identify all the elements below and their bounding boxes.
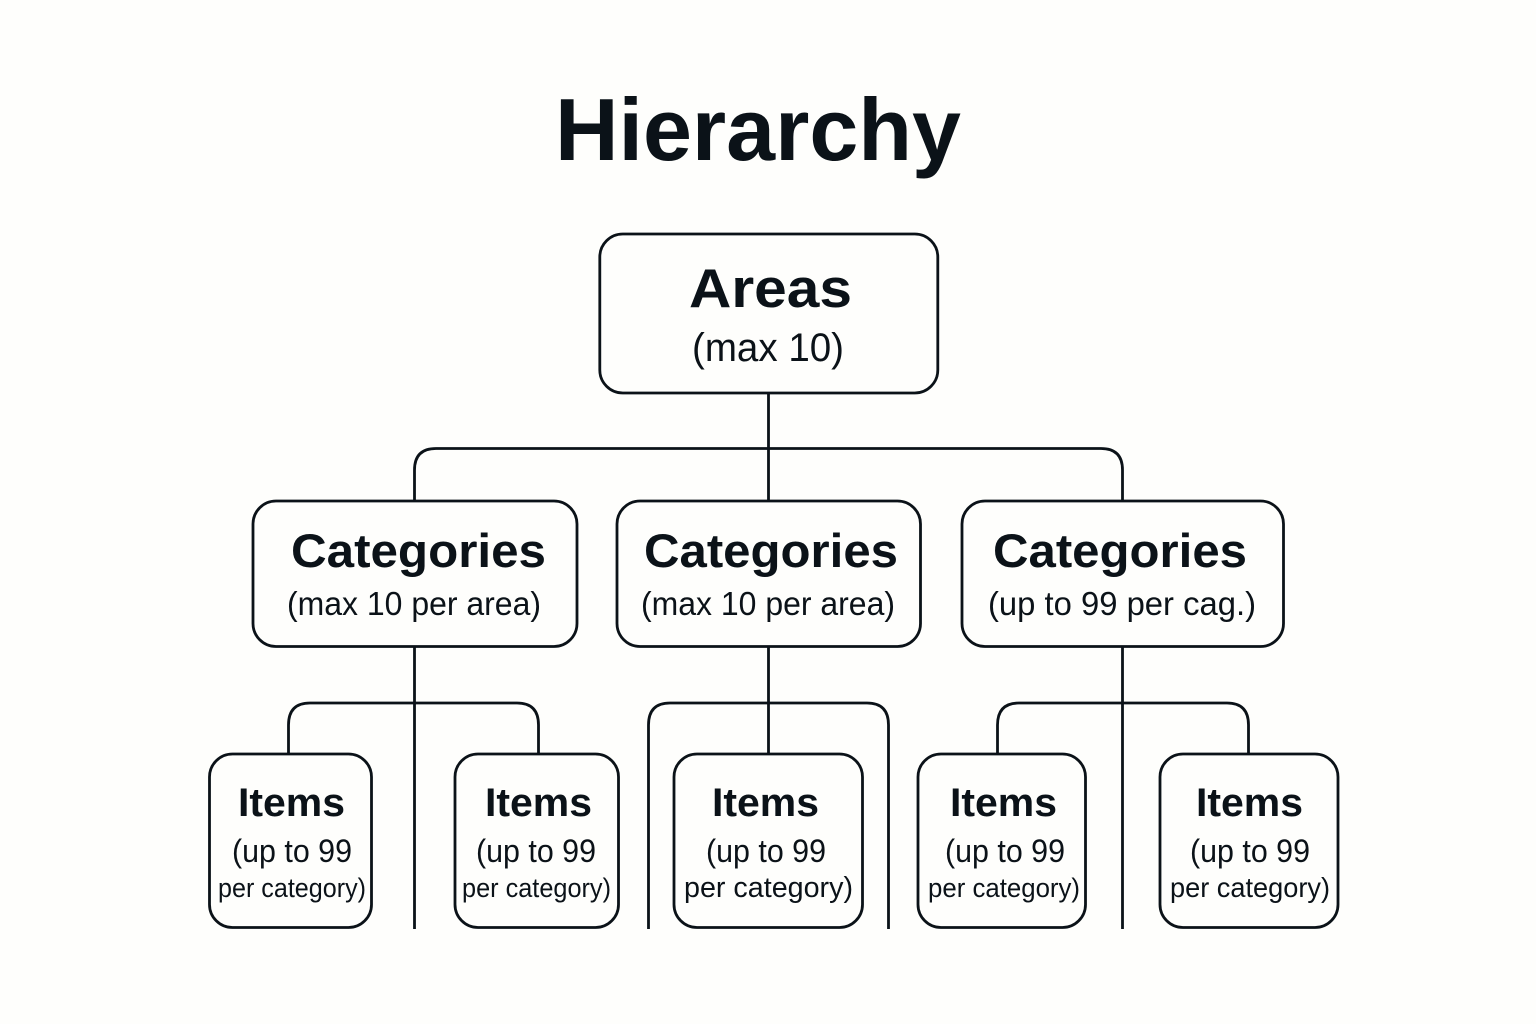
heading: items 2: Items	[485, 781, 592, 825]
subtext: items 4 line 1: (up to 99	[945, 833, 1065, 869]
heading: category 2: Categories	[644, 524, 898, 577]
title: Hierarchy	[555, 80, 961, 179]
connectors: middle category to items	[648, 646, 888, 929]
heading: items 1: Items	[238, 781, 345, 825]
subtext: items 5 line 2: per category)	[1170, 872, 1330, 903]
heading: areas: Areas	[689, 257, 852, 319]
subtext: category 2: (max 10 per area)	[641, 585, 895, 622]
subtext: items 5 line 1: (up to 99	[1190, 833, 1310, 869]
box: items 3	[674, 754, 862, 928]
heading: category 3: Categories	[993, 524, 1247, 577]
connectors: left category to items	[288, 646, 538, 929]
subtext: items 1 line 1: (up to 99	[232, 833, 352, 869]
connectors: areas to categories	[414, 393, 1122, 500]
subtext: items 2 line 1: (up to 99	[476, 833, 596, 869]
box: items 2	[455, 754, 618, 928]
subtext: items 1 line 2: per category)	[218, 873, 366, 903]
connectors: right category to items	[998, 646, 1248, 929]
box: items 4	[918, 754, 1086, 928]
subtext: items 3 line 2: per category)	[684, 872, 853, 904]
subtext: items 3 line 1: (up to 99	[706, 833, 826, 869]
box: items 1	[210, 754, 372, 928]
subtext: areas: (max 10)	[692, 326, 844, 370]
heading: items 5: Items	[1196, 781, 1303, 825]
box: items 5	[1160, 754, 1338, 928]
box: category 1	[253, 501, 577, 646]
subtext: items 4 line 2: per category)	[928, 873, 1080, 903]
subtext: category 1: (max 10 per area)	[287, 585, 541, 622]
subtext: items 2 line 2: per category)	[462, 873, 611, 903]
heading: category 1: Categories	[291, 524, 546, 577]
box: areas	[600, 234, 938, 393]
heading: items 3: Items	[712, 781, 819, 825]
box: category 2	[617, 501, 920, 646]
box: category 3	[962, 501, 1284, 646]
subtext: category 3: (up to 99 per cag.)	[988, 585, 1256, 622]
heading: items 4: Items	[950, 781, 1057, 825]
